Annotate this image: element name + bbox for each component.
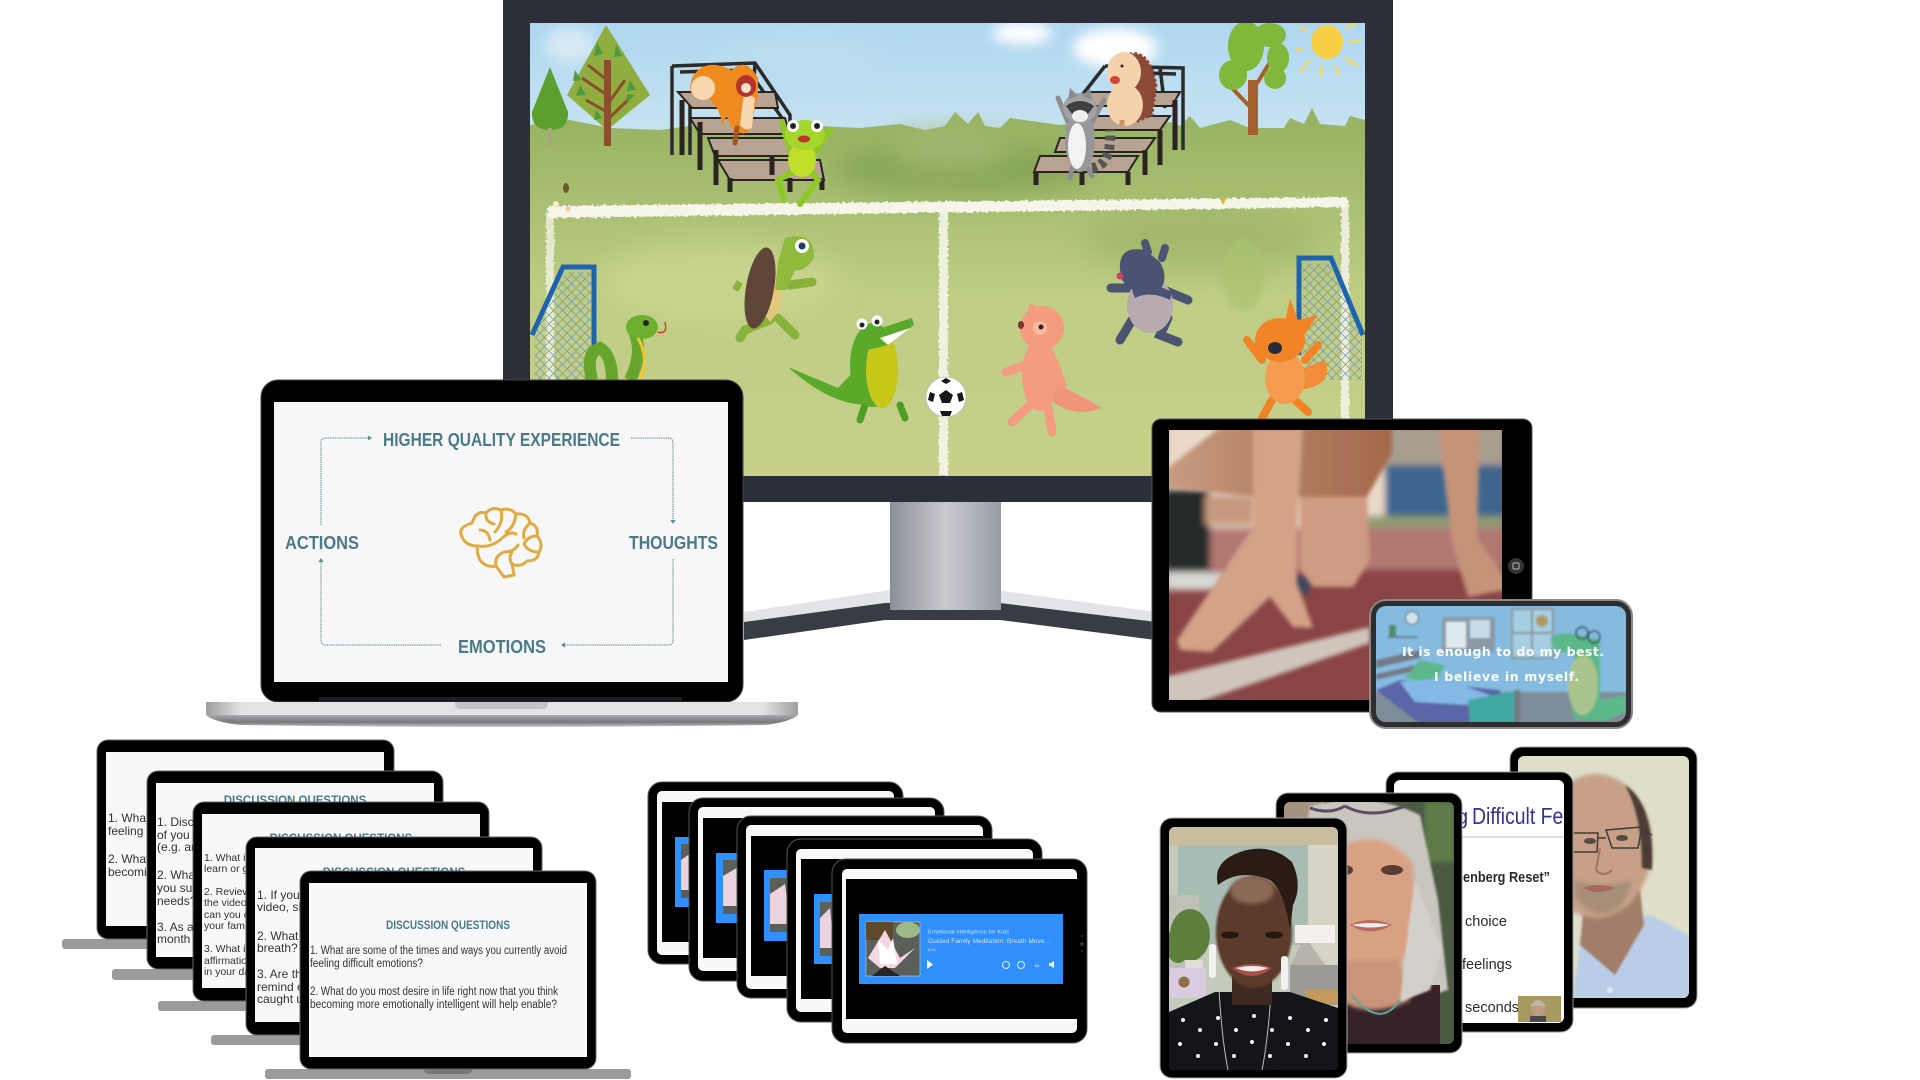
snake — [590, 315, 666, 380]
discussion laptop 3: 1. What is one — [204, 852, 271, 864]
tablet with sprinter video — [1152, 419, 1532, 712]
sky — [530, 23, 1365, 130]
turtle running — [735, 236, 814, 338]
discussion laptop 3: learn or gain — [204, 863, 263, 875]
discussion laptop 4: 2. What does — [257, 929, 328, 943]
discussion laptop 2: needs? — [157, 894, 197, 908]
track text: Guided Family Meditation: Breath Move... — [928, 938, 1050, 945]
discussion laptop 3: affirmation — [204, 955, 253, 967]
discussion laptop 4: DISCUSSION QUESTIONS — [323, 867, 466, 879]
presenter thumbnail — [1518, 996, 1561, 1022]
bee and flowers — [553, 183, 1227, 212]
affirmation text — [1402, 644, 1604, 684]
phone with affirmation video — [1370, 600, 1632, 728]
lotus thumbnail — [866, 922, 920, 976]
discussion laptop 5 front: feeling difficult emotions? — [310, 958, 423, 970]
discussion laptop 4: 3. Are there — [257, 967, 319, 981]
track text — [928, 930, 1050, 952]
home button — [1508, 558, 1524, 574]
slide — [274, 402, 728, 682]
face — [1216, 876, 1292, 988]
player controls: 1x — [1035, 963, 1040, 968]
discussion laptop 2: 1. Discuss how — [157, 815, 238, 829]
affirmation text: It is enough to do my best. — [1402, 644, 1604, 659]
cycle labels — [285, 429, 718, 657]
faint bush — [1222, 273, 1264, 310]
discussion laptop 3: the video guide — [204, 897, 275, 909]
monitor bezel — [503, 0, 1393, 502]
video tablet stack — [1160, 747, 1697, 1078]
audio tablet 5 front — [832, 859, 1087, 1043]
tablet: man in glasses — [1510, 747, 1697, 1008]
discussion laptop 4: caught up — [257, 992, 310, 1006]
discussion laptop 4: video, should — [257, 900, 328, 914]
raccoon cheering — [1058, 88, 1110, 178]
discussion laptop 1: 1. What are some — [108, 811, 203, 825]
discussion laptop 2: DISCUSSION QUESTIONS — [224, 795, 367, 807]
laptop with emotion cycle slide — [206, 380, 798, 727]
discussion laptop 3: DISCUSSION QUESTIONS — [270, 833, 413, 845]
discussion laptop 3: in your daily — [204, 966, 261, 978]
field lines — [546, 197, 1349, 476]
discussion laptop 5 front — [265, 871, 631, 1079]
hair — [1217, 849, 1298, 930]
tablet: woman with grey hair — [1276, 793, 1462, 1053]
sun — [1296, 24, 1362, 78]
cycle labels: ACTIONS — [285, 532, 359, 553]
tablet: Rosenberg Reset slide: feelings — [1462, 957, 1512, 973]
discussion laptop 2: 3. As a family — [157, 920, 228, 934]
tablet: Rosenberg Reset slide: choice — [1465, 914, 1507, 930]
discussion laptop 1: becoming more — [108, 865, 191, 879]
discussion laptop stack — [62, 740, 631, 1079]
icon: brain — [461, 509, 541, 577]
discussion laptop 4 — [211, 837, 542, 1045]
audio player card — [859, 914, 1063, 984]
orange squirrel jumping — [1247, 298, 1327, 418]
discussion laptop 2: you support — [157, 881, 220, 895]
crocodile — [788, 316, 914, 420]
tablet: Rosenberg Reset slide: g — [1456, 804, 1468, 829]
soccer field game scene — [530, 21, 1365, 476]
discussion laptop 5 front: becoming more emotionally intelligent will help enable? — [310, 999, 557, 1011]
right bleachers — [1034, 66, 1183, 185]
cycle labels: EMOTIONS — [458, 636, 546, 657]
discussion laptop 3: 3. What is an — [204, 943, 265, 955]
fox — [1006, 303, 1102, 432]
cycle labels: THOUGHTS — [629, 532, 718, 553]
discussion laptop 3: 2. Review the — [204, 886, 268, 898]
trees — [532, 21, 1289, 146]
audio tablet 3 — [737, 816, 992, 998]
hedgehog cheering — [1107, 52, 1156, 126]
goals — [532, 258, 1363, 380]
plant — [1166, 909, 1210, 963]
tablet: Rosenberg Reset slide: enberg Reset” — [1463, 870, 1550, 886]
laptop lid — [261, 380, 743, 702]
discussion laptop 5 front: 2. What do you most desire in life right now that you think — [310, 986, 558, 998]
frog cheering — [778, 120, 830, 204]
discussion laptop 1 — [62, 740, 394, 949]
discussion laptop 4: breath? — [257, 941, 298, 955]
discussion laptop 2: month the — [157, 932, 211, 946]
cycle labels: HIGHER QUALITY EXPERIENCE — [383, 429, 620, 450]
tablet: smiling woman — [1160, 818, 1347, 1078]
sofa and pillows — [1170, 925, 1338, 1005]
neck — [1232, 975, 1272, 1005]
soccer ball — [926, 377, 966, 417]
sprinter photo — [1165, 425, 1505, 703]
bedroom scene — [1376, 606, 1626, 722]
cycle arrows — [321, 438, 673, 645]
track text: 8:01 — [928, 947, 937, 952]
side camera dots — [1080, 935, 1084, 952]
discussion laptop 5 front: 1. What are some of the times and ways you currently avoid — [310, 945, 567, 957]
tablet: Rosenberg Reset slide — [1386, 772, 1574, 1032]
desktop monitor — [503, 0, 1393, 640]
tablet: Rosenberg Reset slide: Difficult Feelings — [1472, 803, 1614, 829]
discussion laptop 3: your family — [204, 920, 256, 932]
audio tablet 4 — [787, 839, 1042, 1022]
dress — [1169, 992, 1338, 1070]
discussion laptop 3 — [158, 802, 489, 1011]
discussion laptop 5 front: DISCUSSION QUESTIONS — [386, 920, 510, 932]
discussion laptop 3: can you com — [204, 909, 264, 921]
discussion laptop 4: 1. If you practice — [257, 888, 345, 902]
discussion laptop 2: 2. What can — [157, 868, 221, 882]
discussion laptop 2: of you think — [157, 828, 219, 842]
discussion laptop 1: feeling difficult — [108, 824, 184, 838]
left bleachers — [672, 63, 824, 192]
affirmation text: I believe in myself. — [1434, 669, 1579, 684]
squirrel in bleachers — [690, 65, 758, 143]
audio tablet 2 — [689, 798, 944, 981]
monitor stand — [744, 500, 1156, 640]
tablet: Rosenberg Reset slide: seconds — [1465, 1000, 1519, 1016]
discussion laptop 1: 2. What do you — [108, 852, 189, 866]
audio tablet stack — [648, 782, 1087, 1043]
track text: Emotional Intelligence for Kids — [928, 930, 1009, 936]
player controls — [927, 960, 1054, 969]
laptop base — [206, 702, 798, 727]
tapir — [1111, 243, 1188, 342]
audio tablet 1 — [648, 782, 903, 964]
discussion laptop 4: remind each — [257, 980, 323, 994]
discussion laptop 2: (e.g. anger) — [157, 840, 219, 854]
discussion laptop 2 — [112, 771, 443, 980]
arrowheads — [318, 436, 676, 648]
